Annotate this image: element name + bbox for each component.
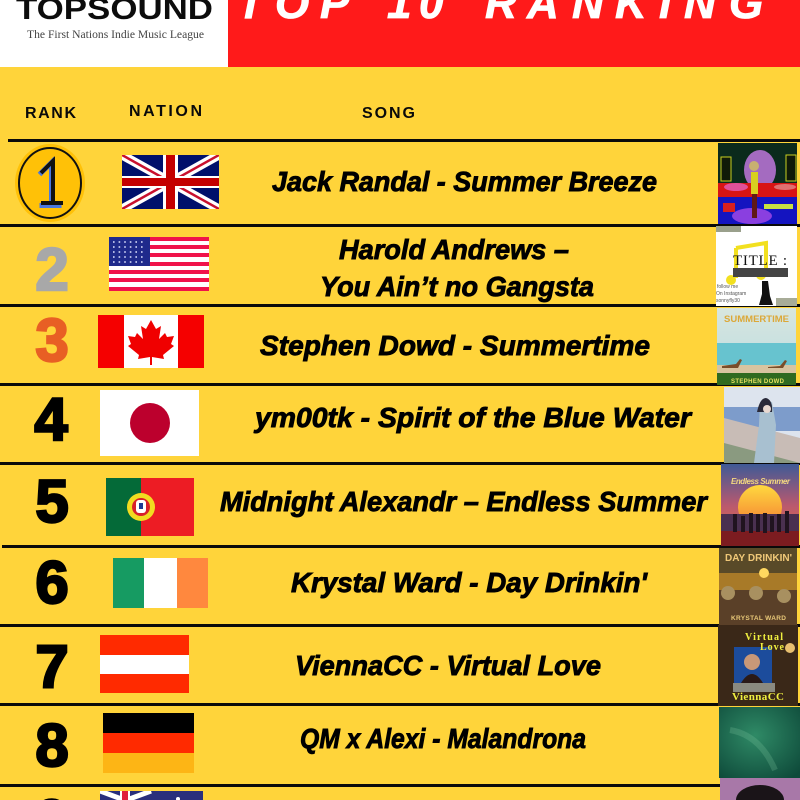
song 4: ym00tk - Spirit of the Blue Water — [253, 402, 693, 433]
album cover 3: SUMMERTIME — [724, 314, 789, 325]
album cover 3: STEPHEN DOWD — [731, 379, 785, 385]
album cover 7: Virtual — [745, 632, 783, 643]
flag: Ireland — [113, 558, 208, 608]
album cover 2: TITLE : — [733, 253, 787, 269]
album cover 2: On Instagram — [716, 291, 746, 297]
song 8: QM x Alexi - Malandrona — [300, 723, 586, 754]
album cover 6 — [719, 548, 797, 625]
flag: Germany — [103, 713, 194, 773]
rank 7: 7 — [35, 633, 69, 700]
flag: Austria — [100, 635, 189, 693]
song 5: Midnight Alexandr – Endless Summer — [220, 486, 709, 517]
song 3: Stephen Dowd - Summertime — [260, 330, 650, 361]
column headers — [25, 103, 415, 122]
rank 2: 2 — [35, 236, 69, 303]
flag: United Kingdom — [122, 155, 219, 209]
header: logo panel — [0, 0, 228, 67]
flag: Japan — [100, 390, 199, 456]
album cover 9 — [720, 778, 800, 800]
flag: Australia — [100, 791, 203, 800]
album cover 2: sonnyfly30 — [716, 298, 740, 304]
rank 8: 8 — [35, 712, 69, 779]
song 2: You Ain’t no Gangsta — [320, 271, 594, 302]
rank 3: 3 — [35, 307, 69, 374]
column: song: SONG — [362, 105, 415, 122]
rank 5: 5 — [35, 468, 69, 535]
song 7: ViennaCC - Virtual Love — [295, 650, 601, 681]
song 2 — [320, 234, 594, 302]
header: title banner — [228, 0, 800, 67]
album cover 7: ViennaCC — [732, 691, 784, 703]
album cover 3 — [717, 308, 796, 385]
flag: Canada — [98, 315, 204, 368]
song 6: Krystal Ward - Day Drinkin' — [291, 567, 648, 598]
album cover 5 — [721, 464, 799, 546]
logo tagline: The First Nations Indie Music League — [27, 27, 204, 41]
album cover 6: KRYSTAL WARD — [731, 615, 786, 622]
column: rank: RANK — [25, 105, 76, 122]
flag: Portugal — [106, 478, 194, 536]
song 1: Jack Randal - Summer Breeze — [272, 166, 657, 197]
column: nation: NATION — [129, 103, 202, 120]
album cover 4 — [724, 387, 800, 463]
album cover 2: follow me — [717, 284, 738, 290]
album cover 2 — [716, 226, 797, 306]
rank 6: 6 — [35, 549, 69, 616]
album cover 6: DAY DRINKIN' — [725, 553, 792, 564]
album cover 5: Endless Summer — [731, 477, 791, 486]
album cover 8 — [719, 707, 800, 778]
album cover 7 — [718, 625, 798, 706]
rank 4: 4 — [34, 386, 68, 453]
song 2: Harold Andrews – — [339, 234, 569, 265]
album cover 7: Love — [760, 642, 785, 653]
rank 1 badge — [15, 144, 85, 222]
album cover 1 — [718, 143, 797, 224]
flag: United States — [109, 237, 209, 291]
